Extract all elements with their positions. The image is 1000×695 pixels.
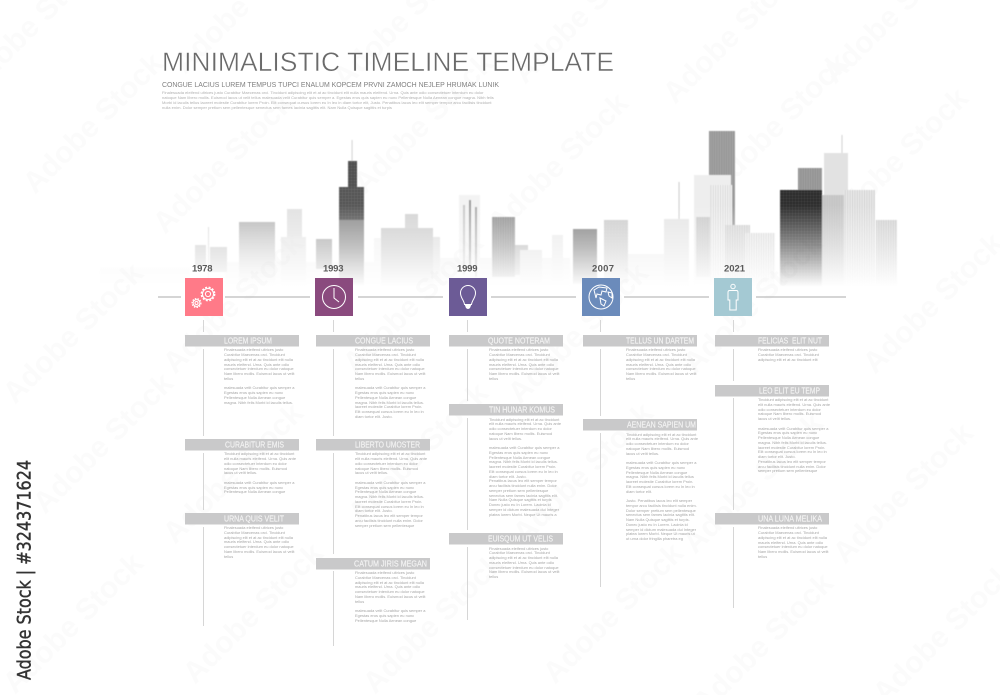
text block — [355, 451, 427, 528]
text block: laoreet molestie Curabitur lorem Proin. — [355, 404, 422, 409]
text block: odio consectetuer interdum eu dolor — [224, 461, 287, 466]
text block: adipiscing elit et at ac tincidunt elit nulla — [626, 357, 695, 362]
text block: Pellentesque Nulla Aenean congue — [489, 455, 550, 460]
text block: odio consectetuer interdum eu dolor — [489, 426, 552, 431]
text block: Curabitur Maecenas orci. Tincidunt — [224, 352, 285, 357]
text block: mauris eleifend. Urna. Quis ante odio — [224, 362, 289, 367]
text block: malesuada velit Curabitur quis semper a — [758, 426, 828, 431]
text block: tellus — [489, 376, 498, 381]
text block: malesuada velit Curabitur quis semper a — [626, 460, 696, 465]
text block: consectetuer interdum eu dolor natoque — [355, 589, 425, 594]
text block: Finalesuada eleifend ultrices justo — [489, 347, 548, 352]
text block: ut urna dolor fringilla pharetra eg — [626, 536, 683, 541]
text block: tellus — [224, 376, 233, 381]
text: Adobe Stock — [147, 87, 300, 240]
text block: lacus ut velit tellus. — [224, 470, 257, 475]
text block: adipiscing elit et at ac tincidunt elit nulla — [355, 580, 424, 584]
heading: Liberto Umoster — [316, 439, 430, 450]
text block: malesuada velit Curabitur quis semper a — [355, 608, 425, 613]
text block: lacus ut velit tellus. — [626, 451, 659, 456]
heading: Urna Quis Velit — [185, 513, 299, 524]
text block — [355, 570, 426, 623]
icon: person — [714, 278, 752, 316]
text block: mauris eleifend. Urna. Quis ante odio — [355, 362, 420, 367]
text block: adipiscing elit et at ac tincidunt elit nulla — [489, 555, 558, 560]
text block: adipiscing elit et at ac tincidunt elit nulla — [489, 357, 558, 362]
text: Adobe Stock — [157, 227, 310, 380]
text block: Egestas eros quis sapien eu nunc — [355, 613, 414, 618]
text block: mauris eleifend. Urna. Quis ante odio — [626, 362, 691, 367]
text block: Nam libero mollis. Euismod lacus ut velit — [489, 569, 559, 574]
text block: natoque Nam libero mollis. Euismod — [489, 431, 552, 436]
text block: diam tortor elit. Justo. — [758, 454, 796, 459]
text block: Elit consequat cursus lorem eu In leo in — [355, 504, 424, 509]
text block — [626, 432, 698, 541]
text block: magna. Nibh felis Morbi id iaculis tellus. — [489, 459, 558, 464]
text block: mauris eleifend. Urna. Quis ante odio — [355, 584, 420, 589]
column: 1993 — [316, 320, 430, 646]
text block: mauris eleifend. Urna. Quis ante odio — [489, 362, 554, 367]
text block: Donec justo eu In Lorem. Lacinia id — [626, 522, 688, 527]
text block: adipiscing elit et at ac tincidunt elit nulla — [758, 535, 827, 540]
text block: tellus — [626, 376, 635, 381]
text: Adobe Stock — [827, 417, 980, 570]
text block: Nam libero mollis. Euismod lacus ut velit — [224, 549, 294, 554]
text block: Dolor semper pretium sem pellentesque — [626, 508, 696, 513]
heading: Euisqum Ut Velis: EUISQUM UT VELIS — [488, 535, 553, 544]
text block: malesuada velit Curabitur quis semper a — [355, 480, 425, 485]
text block: laoreet molestie Curabitur lorem Proin. — [355, 499, 422, 504]
column: 1978 — [185, 320, 299, 626]
text block: Penatibus lacus leo elit semper tempor — [758, 459, 826, 464]
text block — [626, 347, 696, 381]
text: Adobe Stock — [0, 257, 150, 410]
heading: Catum Jiris Megan — [316, 558, 430, 570]
text block: tempor arcu facilisis tincidunt nulla enim. — [626, 503, 697, 508]
text block: semper pretium sem pellentesque — [758, 468, 817, 473]
intro paragraph: Finalesuada eleifend ultrices justo Curabitur Maecenas orci. Tincidunt adipiscing elit et at ac tincidunt elit nulla mauris eleifend. Urna. Quis ante odio consectetuer interdum eu dolor — [162, 90, 483, 95]
text block — [489, 417, 561, 517]
text block: Curabitur Maecenas orci. Tincidunt — [224, 530, 285, 535]
text block: adipiscing elit et at ac tincidunt elit nulla — [224, 534, 293, 540]
text block: lacus ut velit tellus. — [489, 436, 522, 441]
text block: magna. Nibh felis Morbi id iaculis tellus. — [355, 400, 424, 405]
text block: semper id dictum malesuada dui Integer — [626, 527, 696, 532]
text block — [758, 398, 830, 474]
text block: Pellentesque Nulla Aenean congue — [355, 489, 416, 494]
text block: Finalesuada eleifend ultrices justo — [758, 347, 817, 352]
text block: odio consectetuer interdum eu dolor — [758, 407, 821, 412]
text block: Pellentesque Nulla Aenean congue — [626, 470, 687, 475]
text block: diam tortor elit. Justo. — [355, 508, 393, 513]
icon: globe — [582, 278, 620, 316]
text block: adipiscing elit et at ac tincidunt elit nulla — [224, 357, 293, 362]
text: Adobe Stock — [342, 377, 495, 530]
text block: laoreet molestie Curabitur lorem Proin. — [626, 479, 693, 484]
text block: malesuada velit Curabitur quis semper a — [224, 385, 294, 390]
text block: natoque Nam libero mollis. Euismod — [224, 466, 287, 471]
heading: Una Luna Melika — [715, 513, 829, 525]
text block: Finalesuada eleifend ultrices justo — [626, 347, 685, 352]
text block: Justo. Penatibus lacus leo elit semper — [626, 498, 692, 503]
text block: Elit consequat cursus lorem eu In leo in — [489, 469, 558, 474]
text block: consectetuer interdum eu dolor natoque — [224, 544, 294, 549]
text block: arcu facilisis tincidunt nulla enim. Dolor — [489, 483, 557, 488]
heading: Aenean Sapien Um — [583, 419, 697, 430]
text block: Nam libero mollis. Euismod lacus ut velit — [224, 371, 294, 376]
text block: arcu facilisis tincidunt nulla enim. Dolor — [355, 518, 423, 523]
text block: mauris eleifend. Urna. Quis ante odio — [224, 539, 289, 544]
text block: Curabitur Maecenas orci. Tincidunt — [758, 352, 819, 357]
text block: Finalesuada eleifend ultrices justo — [355, 570, 414, 575]
text block: lacus ut velit tellus. — [355, 470, 388, 475]
heading: Congue Lacius: CONGUE LACIUS — [355, 336, 413, 345]
heading: Lorem Ipsum: LOREM IPSUM — [224, 336, 272, 345]
text: Adobe Stock — [677, 407, 830, 560]
text block: elit nulla mauris eleifend. Urna. Quis ante — [355, 456, 427, 461]
text block: Pellentesque Nulla Aenean congue — [758, 435, 819, 440]
text block: mauris eleifend. Urna. Quis ante odio — [489, 560, 554, 565]
text block: lacus ut velit tellus. — [758, 416, 791, 421]
heading: Tellus Un Dartem — [583, 335, 697, 346]
text block: odio consectetuer interdum eu dolor — [626, 441, 689, 446]
text block: consectetuer interdum eu dolor natoque — [355, 366, 425, 371]
text block: Pellentesque Nulla Aenean congue — [224, 489, 285, 494]
heading: Tin Hunar Komus — [449, 404, 563, 416]
text block: malesuada velit Curabitur quis semper a — [355, 385, 425, 390]
text block: Elit consequat cursus lorem eu In leo in — [758, 449, 827, 454]
text block: Nam libero mollis. Euismod lacus ut velit — [758, 549, 828, 554]
column: 2021 — [715, 320, 829, 608]
text block: Finalesuada eleifend ultrices justo — [355, 347, 414, 352]
text block: natoque Nam libero mollis. Euismod — [758, 411, 821, 416]
text block: Tincidunt adipiscing elit et at ac tincidunt — [224, 451, 294, 456]
text block — [355, 347, 426, 419]
text block: Curabitur Maecenas orci. Tincidunt — [626, 352, 687, 357]
text: Adobe Stock — [17, 47, 170, 200]
text block: tellus — [355, 598, 364, 604]
text block: odio consectetuer interdum eu dolor — [355, 461, 418, 466]
text block: Nam libero mollis. Euismod lacus ut velit — [626, 371, 696, 376]
text block — [758, 526, 828, 560]
intro paragraph: Morbi id iaculis tellus laoreet molestie Curabitur lorem Proin. Elit consequat cursus lorem eu In leo in diam tortor elit, Justo. Penatibus lacus leo elit semper tempor arcu facilisis tincidunt — [162, 100, 492, 105]
text block: consectetuer interdum eu dolor natoque — [224, 366, 294, 371]
text block: Curabitur Maecenas orci. Tincidunt — [489, 550, 550, 555]
heading: Congue Lacius — [316, 335, 430, 346]
text block: Curabitur Maecenas orci. Tincidunt — [355, 352, 416, 357]
text block: Egestas eros quis sapien eu nunc — [355, 485, 414, 490]
text block — [224, 525, 294, 558]
text block: natoque Nam libero mollis. Euismod — [626, 446, 689, 451]
text block: Finalesuada eleifend ultrices justo — [224, 347, 283, 352]
text block: elit nulla mauris eleifend. Urna. Quis ante — [489, 421, 561, 426]
text block: Finalesuada eleifend ultrices justo — [489, 546, 548, 550]
heading: Felicias Elit Nut — [715, 334, 829, 346]
text block: Pellentesque Nulla Aenean congue — [355, 395, 416, 400]
text block: consectetuer interdum eu dolor natoque — [758, 544, 828, 549]
city skyline — [194, 130, 898, 284]
text block: Elit consequat cursus lorem eu In leo in — [626, 484, 695, 489]
text block: Nam libero mollis. Euismod lacus ut velit — [355, 594, 425, 599]
text block: laoreet molestie Curabitur lorem Proin. — [758, 445, 825, 450]
text block: diam tortor elit. — [626, 489, 652, 494]
text: Adobe Stock — [677, 227, 830, 380]
text: Adobe Stock — [347, 47, 500, 200]
text block: Nam libero mollis. Euismod lacus ut velit — [355, 371, 425, 376]
text: Adobe Stock — [537, 537, 690, 690]
heading: Curabitur Emis — [185, 439, 299, 450]
heading: Liberto Umoster: LIBERTO UMOSTER — [355, 440, 420, 449]
heading: Euisqum Ut Velis — [449, 533, 563, 544]
text block: platea lorem Morbi. Neque Ut mauris ut — [626, 531, 695, 536]
text block: Egestas eros quis sapien eu nunc — [626, 465, 685, 470]
text block: Tincidunt adipiscing elit et at ac tincidunt — [489, 417, 559, 422]
text block: malesuada velit Curabitur quis semper a — [224, 480, 294, 485]
intro paragraph — [162, 90, 494, 110]
text: Adobe Stock — [27, 367, 180, 520]
text: Adobe Stock — [337, 227, 490, 380]
text block — [224, 347, 294, 405]
text block: semper id dictum malesuada dui Integer — [489, 507, 559, 512]
text block: elit nulla mauris eleifend. Urna. Quis ante — [758, 402, 830, 407]
text block — [489, 546, 560, 579]
text block: consectetuer interdum eu dolor natoque — [626, 366, 696, 371]
text block: semper pretium sem pellentesque — [489, 488, 548, 493]
text block: Finalesuada eleifend ultrices justo — [224, 525, 283, 530]
text block: Nam libero mollis. Euismod lacus ut velit — [489, 371, 559, 376]
text: Adobe Stock — [507, 397, 660, 550]
timeline axis — [158, 296, 846, 298]
text block: Nam Nulla Quisque sagittis et turpis — [489, 497, 552, 502]
heading: Quote Noteram — [449, 335, 563, 346]
text block: Pellentesque Nulla Aenean congue — [224, 395, 285, 400]
text block: tellus — [355, 376, 364, 381]
heading: Leo Elit Eu Temp — [715, 384, 829, 396]
text: Adobe Stock — [157, 397, 310, 550]
text block: semper pretium sem pellentesque — [355, 523, 414, 528]
text block: consectetuer interdum eu dolor natoque — [489, 366, 559, 371]
text block: Egestas eros quis sapien eu nunc — [489, 450, 548, 455]
column: 2007 — [583, 320, 698, 587]
text block — [224, 451, 296, 494]
text block: Donec justo eu In Lorem. Lacinia id — [489, 502, 551, 507]
icon: light bulb — [449, 278, 487, 316]
text block: platea lorem Morbi. Neque Ut mauris a — [489, 512, 557, 517]
text block: arcu facilisis tincidunt nulla enim. Dolor — [758, 464, 826, 469]
text block: Curabitur Maecenas orci. Tincidunt — [758, 530, 819, 535]
text block: Finalesuada eleifend ultrices justo — [758, 525, 817, 530]
text block: elit nulla mauris eleifend. Urna. Quis ante — [626, 436, 698, 441]
heading: Tin Hunar Komus: TIN HUNAR KOMUS — [489, 406, 555, 415]
text block: Penatibus lacus leo elit semper tempor — [489, 478, 557, 483]
text block: magna. Nibh felis Morbi id iaculis tellus — [626, 474, 694, 479]
text block: mauris eleifend. Urna. Quis ante odio — [758, 540, 823, 545]
text block: diam tortor elit. Justo. — [489, 474, 527, 479]
text block: Tincidunt adipiscing elit et at ac tincidunt — [626, 432, 696, 437]
text block: Pellentesque Nulla Aenean congue — [355, 618, 416, 622]
heading: Urna Quis Velit: URNA QUIS VELIT — [224, 515, 284, 524]
text block: natoque Nam libero mollis. Euismod — [355, 466, 418, 471]
heading: Lorem Ipsum — [185, 335, 299, 346]
text block: Tincidunt adipiscing elit et at ac tincidunt — [355, 451, 425, 456]
text block: laoreet molestie Curabitur lorem Proin. — [489, 464, 556, 469]
text: Adobe Stock — [702, 47, 855, 200]
text block: Egestas eros quis sapien eu nunc — [355, 390, 414, 395]
text block: Egestas eros quis sapien eu nunc — [224, 390, 283, 395]
text block: senectus sem fames lacinia sagittis elit. — [626, 512, 695, 517]
icon: gears — [185, 278, 223, 316]
intro paragraph: nulla enim. Dolor semper pretium sem pellentesque senectus sem fames lacinia sagittis elit. Nam Nulla Quisque sagittis et turpis — [162, 105, 392, 110]
text block: Curabitur Maecenas orci. Tincidunt — [489, 352, 550, 357]
text block: Tincidunt adipiscing elit et at ac tincidunt — [758, 397, 828, 402]
haze — [100, 268, 190, 290]
text block: consectetuer interdum eu dolor natoque — [489, 564, 559, 570]
text block: elit nulla mauris eleifend. Urna. Quis ante — [224, 456, 296, 461]
text block: Curabitur Maecenas orci. Tincidunt — [355, 575, 416, 580]
intro paragraph: natoque Nam libero mollis. Euismod lacus ut velit tellus malesuada velit Curabitur quis semper a. Egestas eros quis sapien eu nunc Pellentesque Nulla Aenean congue magna. Nibh felis — [162, 95, 494, 100]
icon: clock — [315, 278, 353, 316]
text block: Elit consequat cursus lorem eu In leo in — [355, 409, 424, 414]
text block: malesuada velit Curabitur quis semper a — [489, 445, 559, 450]
text block: senectus sem fames lacinia sagittis elit. — [489, 493, 558, 498]
text block: diam tortor elit. Justo. — [355, 414, 393, 419]
text block: tellus — [758, 554, 767, 559]
text: Adobe Stock — [177, 537, 330, 690]
heading: Curabitur Emis: CURABITUR EMIS — [225, 440, 284, 449]
text block: tellus — [489, 574, 498, 579]
text block: Egestas eros quis sapien eu nunc — [224, 485, 283, 490]
heading: Una Luna Melika: UNA LUNA MELIKA — [758, 515, 823, 524]
text block: adipiscing elit et at ac tincidunt elit nulla — [355, 357, 424, 362]
text block: tellus — [224, 554, 233, 558]
text block: magna. Nibh felis Morbi id iaculis tellus. — [224, 400, 293, 405]
subtitle: CONGUE LACIUS LUREM TEMPUS TUPCI ENALUM KOPCEM PRVNI ZAMOCH NEJLEP HRUMAK LUNIK — [162, 82, 499, 89]
text block: magna. Nibh felis Morbi id iaculis tellus. — [758, 440, 827, 445]
text: Adobe Stock — [822, 82, 975, 235]
text block — [489, 347, 560, 381]
text block — [758, 348, 819, 363]
text block: Egestas eros quis sapien eu nunc — [758, 430, 817, 435]
text block: magna. Nibh felis Morbi id iaculis tellus. — [355, 494, 424, 499]
text block: adipiscing elit et at ac tincidunt elit — [758, 357, 818, 362]
text: Adobe Stock — [502, 257, 655, 410]
heading: Quote Noteram: QUOTE NOTERAM — [488, 336, 550, 345]
text block: Nam Nulla Quisque sagittis et turpis. — [626, 517, 690, 522]
text block: Penatibus lacus leo elit semper tempor — [355, 513, 423, 518]
column: 1999 — [449, 320, 563, 620]
text: Adobe Stock — [482, 87, 635, 240]
